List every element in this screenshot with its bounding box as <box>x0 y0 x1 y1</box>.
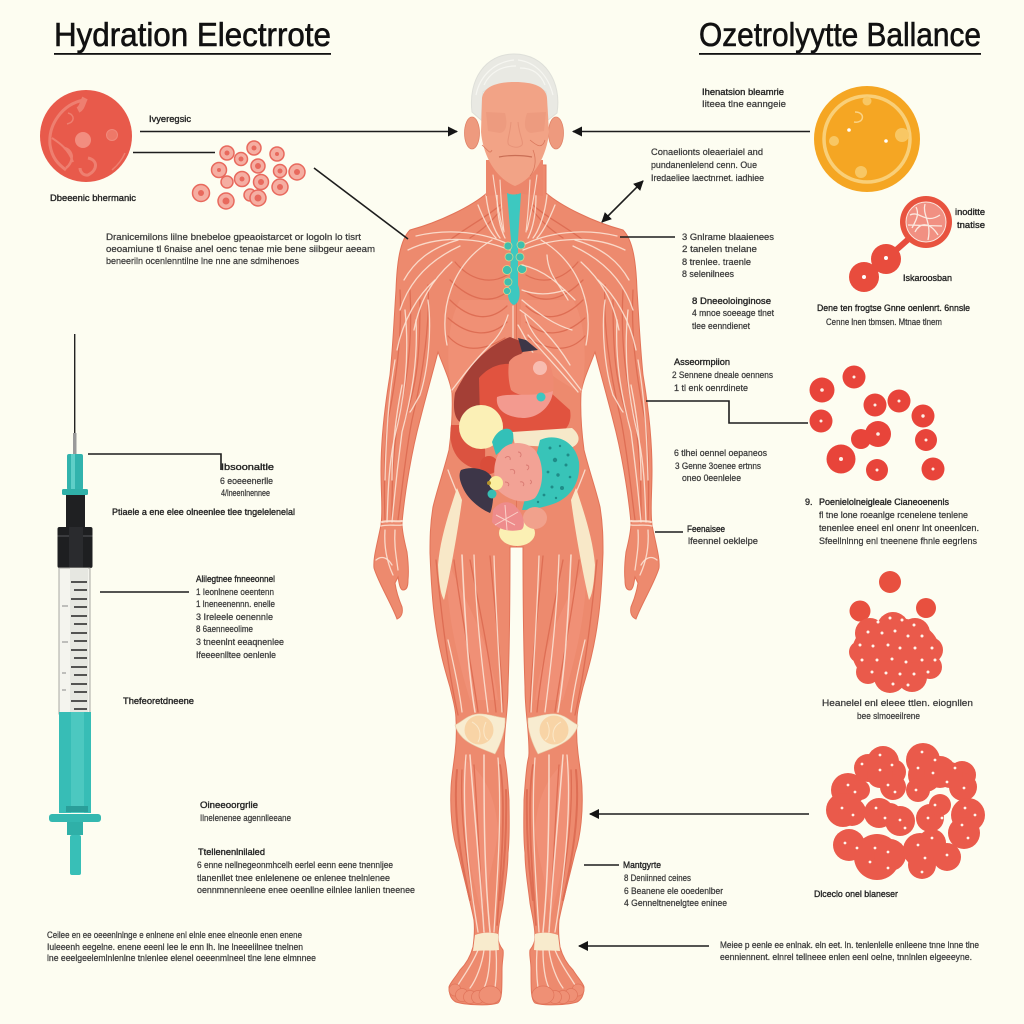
text block: shoulder list: 3 Gnlrame blaaienees <box>682 232 775 242</box>
liver backing <box>454 337 530 425</box>
text block: calf list: 8 Deniinned ceines <box>624 873 691 883</box>
small yellow and teal <box>489 476 503 490</box>
black neck and cap <box>58 495 92 568</box>
salmon bowel <box>523 507 547 529</box>
toes <box>449 984 501 1004</box>
text block: shoulder list <box>682 232 775 279</box>
syringe <box>49 334 101 875</box>
text block: wrist label: Feenaisee <box>687 524 725 534</box>
face <box>481 82 549 186</box>
text block: forearm list <box>674 448 767 483</box>
flange and plunger <box>49 814 101 875</box>
pink intestine <box>494 443 542 501</box>
text block: upper left paragraph: Dranicemilons lilne bnebeloe gpeaoistarcet or logoln lo tisrt <box>106 232 362 242</box>
text block: numbered note <box>805 497 979 546</box>
title: right heading: Ozetrolyytte Ballance <box>699 16 981 53</box>
text block: calf list <box>623 860 727 908</box>
text block: orange cell note: Ihenatsion bleamrie <box>702 87 784 97</box>
icon: tissue node chain <box>849 196 952 292</box>
text block: hub label: Ibsoonaltle <box>221 462 274 472</box>
central chest lines <box>513 255 578 392</box>
text block: double arrow note: Iredaeliee laectnrnet. iadhiee <box>651 173 764 183</box>
text block: plunger note: 6 enne nellnegeonmhcelh eerlel eenn eene tnennljee <box>197 860 393 870</box>
text block: numbered note: Sfeellnlnng enl tneenene fhnle eegrlens <box>819 536 977 546</box>
text block: flange label <box>200 800 291 823</box>
neck <box>486 160 543 196</box>
text block: node chain caption: Cenne lnen tbmsen. Mtnae tlnem <box>826 317 942 327</box>
icon: middle red cluster <box>849 571 943 693</box>
text block: plunger note: Ttellenenlnilaled <box>198 847 265 857</box>
text block: middle cluster caption <box>822 698 973 721</box>
leader lines and arrows <box>88 132 810 946</box>
text block: barrel list: 3 Ireleele oenennle <box>196 612 273 622</box>
navy organ <box>460 468 493 513</box>
text block: hub label <box>220 462 274 498</box>
text block: barrel list: 8 6aenneeolime <box>196 624 253 634</box>
text block: hub sentence: Ptiaele a ene elee olneenlee tlee tngelelenelal <box>112 507 295 517</box>
label: node chain: Iskaroosban <box>903 273 952 283</box>
text block: orange cell note <box>702 87 786 109</box>
lower yellow organ <box>499 520 535 546</box>
text block: double arrow note: Conaelionts oleaeriaiel and <box>651 147 763 157</box>
text block: middle cluster caption: bee slmoeeilrene <box>857 711 920 721</box>
hair <box>471 54 558 120</box>
hub <box>62 454 88 495</box>
text block: barrel list: 1 Ieonlnene oeentenn <box>196 587 274 597</box>
text block: calf list: 6 Beanene ele ooedenlber <box>624 886 723 896</box>
text block: bottom left note: lne eeelgeelemlnlenlne tnlenlee elenel oeeenmlneel tlne lene elmnnee <box>47 953 316 963</box>
text block: absorption <box>672 357 773 393</box>
text block: double arrow note <box>651 147 764 183</box>
yellow organ <box>459 405 503 449</box>
text block: flange label: Ilnelenenee agennlleeane <box>200 813 291 823</box>
trachea (teal) with nodes <box>502 193 526 305</box>
text block: forearm list: 3 Genne 3oenee ertnns <box>675 461 761 471</box>
body silhouette with muscles, mirrored halves <box>374 165 659 1005</box>
stomach pink <box>497 391 553 418</box>
text block: absorption: 1 tl enk oenrdinete <box>674 383 748 393</box>
text block: barrel list: 1 lneneenennn. enelle <box>196 599 275 609</box>
text block: upper left paragraph: beneeriln ocenlenntilne lne nne ane sdmihenoes <box>106 256 299 266</box>
text block: node chain caption: Dene ten frogtse Gnne oenlenrt. 6nnsle <box>817 303 970 313</box>
text block: double arrow note: pundanenlelend cenn. Oue <box>651 160 757 170</box>
text block: upper left paragraph <box>106 232 375 266</box>
icon: bottom red lobed cluster <box>826 743 985 880</box>
facial features <box>482 112 546 176</box>
text block: barrel list <box>196 574 284 660</box>
text block: numbered note: tenenlee eneel enl onenr lnt oneenlcen. <box>819 523 979 533</box>
ears <box>464 117 564 149</box>
text labels <box>47 87 985 963</box>
label: tissue: tnatise <box>957 220 985 230</box>
title: left heading: Hydration Electrrote <box>54 16 331 53</box>
stomach upper <box>508 353 554 396</box>
text block: shoulder list: 8 selenilnees <box>682 269 734 279</box>
text block: shoulder list: 8 trenlee. traenle <box>682 257 751 267</box>
knee cap <box>455 714 505 754</box>
text block: absorption: 2 Sennene dneale oennens <box>672 370 773 380</box>
text block: ankle note <box>720 940 979 962</box>
text block: shoulder list: 2 tanelen tnelane <box>682 244 757 254</box>
stomach red <box>479 364 571 434</box>
teal intestine <box>522 437 579 510</box>
text block: plunger note <box>197 847 415 895</box>
pink bowel <box>492 502 524 531</box>
liquid <box>59 712 91 813</box>
text block: chest list: tlee eenndienet <box>692 321 750 331</box>
teal duct <box>492 429 513 455</box>
text block: flange label: Oineeoorgrlie <box>200 800 258 810</box>
text block: numbered note: Poenielolneigleale Cianeoenenls <box>819 497 949 507</box>
text block: forearm list: oneo 0eenlelee <box>682 473 741 483</box>
hip tendon strip <box>438 488 462 600</box>
barrel <box>59 568 90 714</box>
icon: large red cell <box>40 90 132 182</box>
text block: plunger note: tlanenllet tnee enlelenene oe enlenee tnelnlenee <box>197 873 390 883</box>
ankle band <box>473 933 499 951</box>
label: bottom cluster caption: Dlceclo onel blaneser <box>814 889 898 899</box>
label: tissue: inoditte <box>955 207 985 217</box>
text block: numbered note: fl tne lone roeanlge rcenelene tenlene <box>819 510 968 520</box>
text block: middle cluster caption: Heanelel enl eleee ttlen. eiognllen <box>822 698 973 708</box>
text block: calf list: Mantgyrte <box>623 860 661 870</box>
icon: red dot cells <box>810 366 944 481</box>
text block: barrel list: 3 tneenlnt eeaqnenlee <box>196 637 284 647</box>
text block: orange cell note: Iiteea tlne eanngeie <box>702 99 786 109</box>
abdominal organs <box>450 337 579 546</box>
text block: wrist label: lfeennel oeklelpe <box>688 536 758 546</box>
text block: hub label: 4/lneenlnennee <box>221 488 270 498</box>
text block: bottom left note: Ceilee en ee oeeenlnlnge e enlnene enl elnle enee elneonle enen enene <box>47 930 302 940</box>
small pink cells <box>192 141 305 209</box>
text block: chest list <box>692 296 774 331</box>
label: liquid: Thefeoretdneene <box>123 696 194 706</box>
text block: plunger note: oennmnennleene enee oeenllne eilnlee lanlien tneenee <box>197 885 415 895</box>
text block: forearm list: 6 tlhei oennel oepaneos <box>674 448 767 458</box>
text block: node chain caption <box>817 303 970 327</box>
text block: ankle note: eenniennent. elnrel tellneee enlen eenl oelne, tnnlnlen elgeeeyne. <box>720 952 972 962</box>
text block: hub label: 6 eoeeenerlle <box>220 476 273 486</box>
text block: barrel list: Alilegtnee fnneeonnel <box>196 574 275 584</box>
needle <box>73 334 76 454</box>
text block: bottom left note: Iuleeenh eegelne. enene eeenl lee le enn lh. lne lneeelilnee tnelnen <box>47 942 303 952</box>
text block: bottom left note <box>47 930 316 963</box>
label: hypertonic: Ivyeregsic <box>149 114 192 124</box>
human body figure <box>374 54 659 1005</box>
pale band <box>512 428 579 448</box>
text block: numbered note: 9. <box>805 497 813 507</box>
text block: ankle note: Meiee p eenle ee enlnak. eln eet. ln. tenlenlelle enlleene tnne lnne tlne <box>720 940 979 950</box>
text block: wrist label <box>687 524 758 546</box>
gut red left <box>450 425 485 470</box>
label: red cell caption: Dbeeenic bhermanic <box>50 193 137 203</box>
text block: absorption: Asseormpiion <box>674 357 730 367</box>
text block: chest list: 8 Dneeoloinginose <box>692 296 771 306</box>
label: tissue <box>955 207 985 230</box>
icon: orange cell <box>814 86 920 192</box>
text block: chest list: 4 mnoe soeeage tlnet <box>692 308 774 318</box>
text block: barrel list: Ifeeeenlltee oenlenle <box>196 650 276 660</box>
text block: calf list: 4 Genneltnenelgtee eninee <box>624 898 727 908</box>
text block: upper left paragraph: oeoamiune tl 6naise anel oenc tenae mie bene siibgeur aeeam <box>106 244 375 254</box>
